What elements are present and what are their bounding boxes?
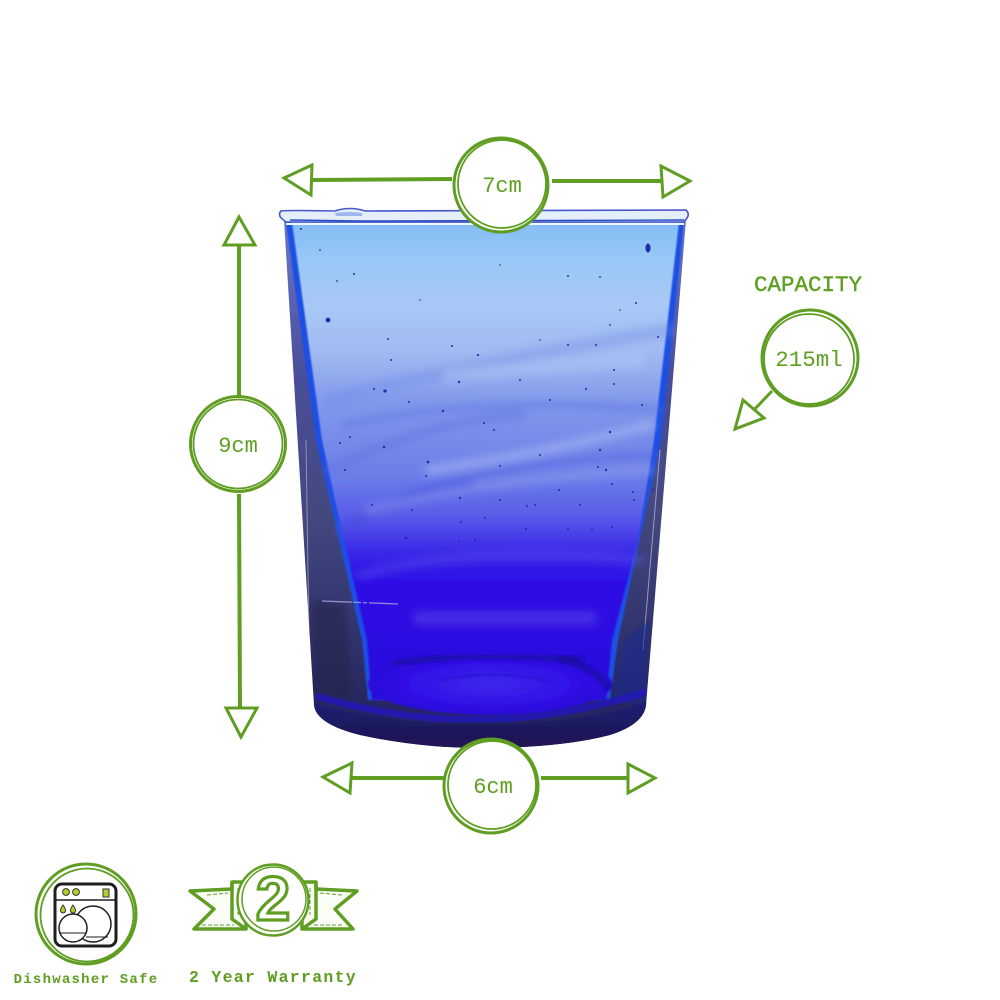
dishwasher safe label: Dishwasher Safe (14, 972, 158, 988)
arrow: left (284, 165, 452, 195)
warranty label: 2 Year Warranty (189, 968, 357, 987)
glass inner body (292, 222, 679, 700)
arrow: left (323, 763, 444, 793)
glass rim (280, 208, 688, 222)
right ribbon (302, 882, 357, 929)
arrow: capacity (735, 391, 772, 429)
dimension: base width 6cm (323, 739, 655, 833)
circle (238, 864, 308, 936)
numeral 2: 2 (256, 865, 290, 934)
circle (444, 739, 538, 833)
icon: 2 year warranty ribbon (190, 864, 357, 936)
circle (454, 138, 548, 232)
circle (190, 396, 286, 492)
glass speckles (300, 228, 659, 571)
label: 7cm (482, 174, 522, 199)
label: 215ml (775, 347, 843, 373)
glass base (314, 701, 646, 748)
blue glass tumbler (280, 208, 688, 760)
arrow: right (552, 166, 690, 197)
label: 9cm (218, 434, 258, 459)
arrow: up (224, 217, 255, 396)
glass inner blue edge (286, 222, 684, 700)
engraved line (322, 601, 398, 604)
circle (762, 310, 858, 406)
arrow: right (541, 764, 655, 793)
right wall highlight (643, 450, 660, 650)
base disc (367, 662, 613, 716)
capacity callout (735, 310, 858, 429)
dimension: top width 7cm (284, 138, 690, 232)
left wall highlight (306, 440, 309, 640)
glass swirls (330, 330, 670, 618)
icon: dishwasher safe (36, 864, 136, 964)
base ring (316, 692, 646, 720)
wall dark patches (312, 600, 352, 700)
label: 6cm (473, 775, 513, 800)
left ribbon (190, 882, 246, 929)
dimension: height 9cm (190, 217, 286, 737)
capacity heading: CAPACITY (754, 272, 862, 298)
disc shadow rim (392, 656, 584, 664)
arrow: down (226, 494, 257, 737)
